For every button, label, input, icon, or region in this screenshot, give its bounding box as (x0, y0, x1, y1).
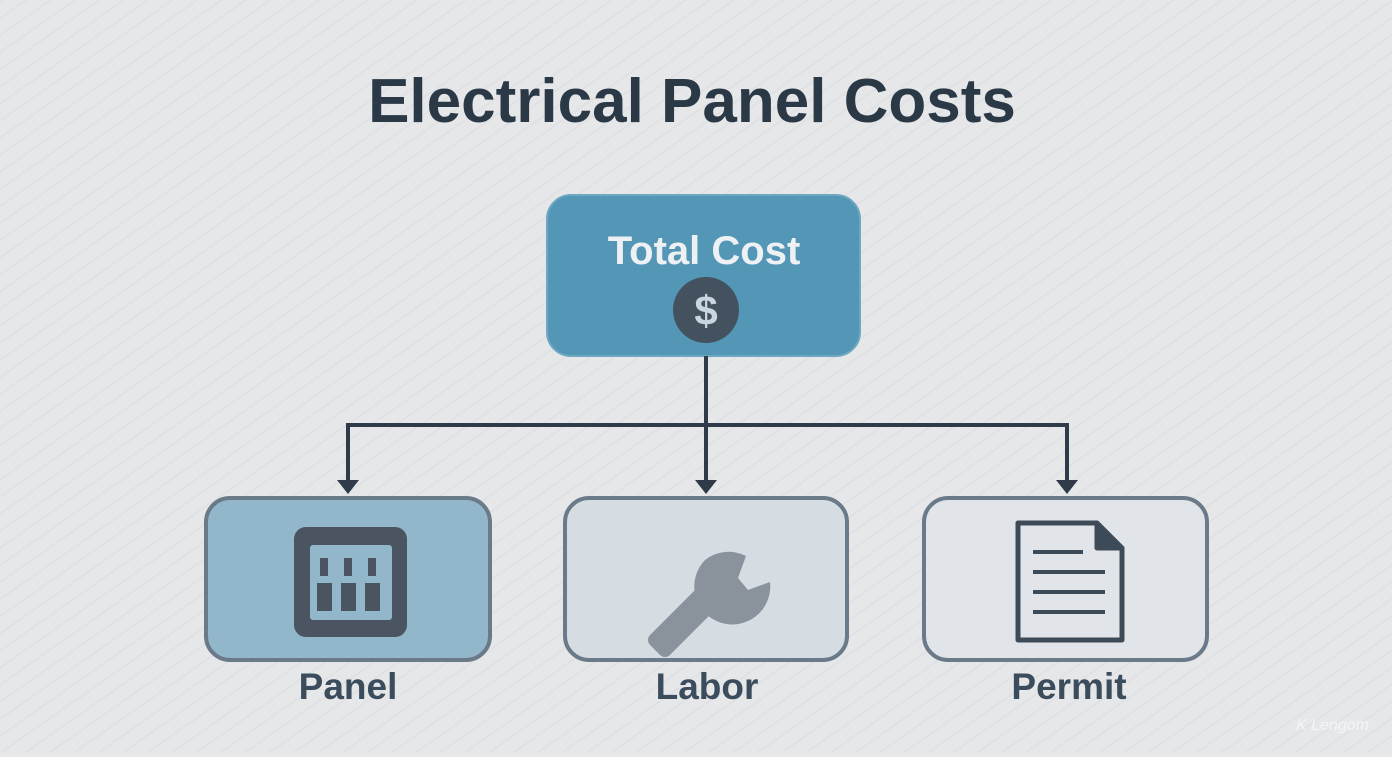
panel: permit (924, 498, 1207, 707)
label: panel: Panel (299, 666, 397, 707)
label: permit: Permit (1011, 666, 1127, 707)
panel: labor (565, 498, 847, 707)
watermark: K Lengom (1296, 717, 1369, 734)
icon: electrical panel (294, 527, 407, 637)
icon: wrench (655, 552, 770, 650)
connector arrows (337, 356, 1078, 494)
title: Electrical Panel Costs (368, 67, 1016, 136)
icon: document (1018, 523, 1122, 640)
panel: panel (206, 498, 490, 707)
icon: dollar: $ (694, 287, 718, 334)
box: total cost (547, 195, 860, 356)
label: labor: Labor (656, 666, 758, 707)
text: total cost: Total Cost (608, 229, 800, 273)
icon: dollar (673, 277, 739, 343)
